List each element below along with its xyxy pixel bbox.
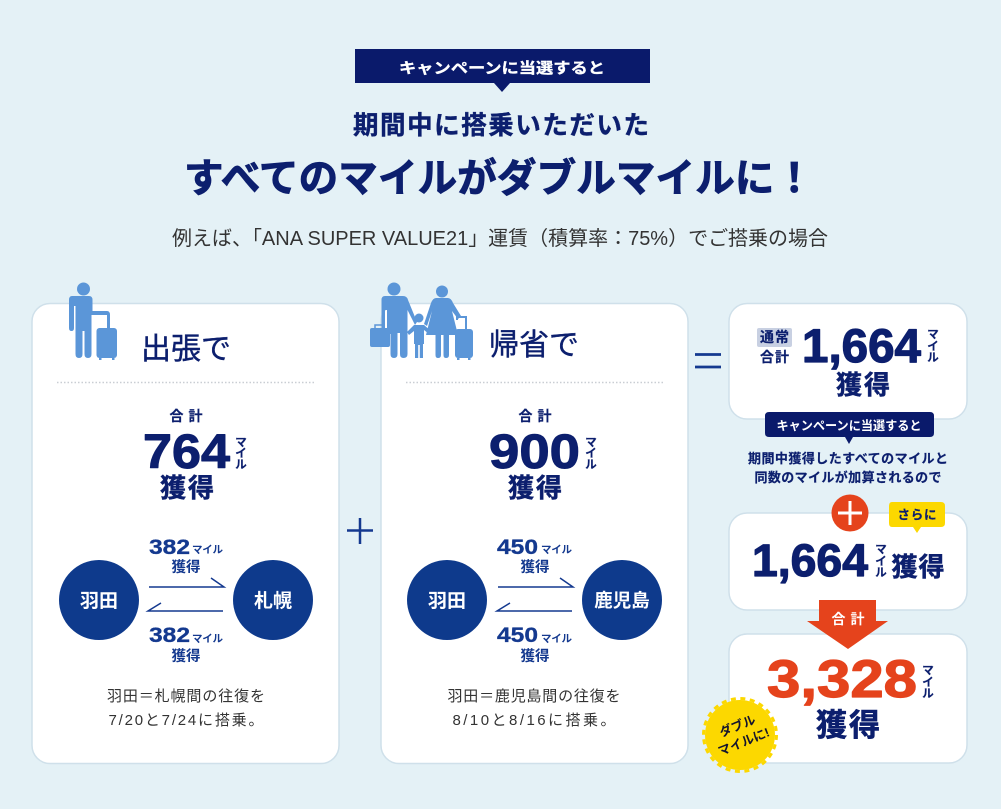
miles unit bbox=[922, 665, 934, 700]
miles unit: イ bbox=[235, 447, 247, 460]
badge: double miles bbox=[704, 698, 776, 772]
miles unit: イ bbox=[927, 340, 939, 353]
earned label: 獲得 bbox=[160, 473, 214, 503]
flight note: 7/20と7/24に搭乗。 bbox=[108, 712, 264, 729]
miles unit: ル bbox=[927, 352, 939, 364]
further tag bbox=[889, 502, 945, 533]
panel: final total bbox=[729, 634, 967, 763]
campaign callout: キャンペーンに当選すると bbox=[776, 418, 922, 433]
equals sign bbox=[695, 354, 721, 367]
heading line 1: 期間中に搭乗いただいた bbox=[353, 112, 649, 140]
explanation text: 期間中獲得したすべてのマイルと bbox=[748, 451, 948, 466]
panel: normal total: 通常 bbox=[760, 329, 789, 345]
plus sign bbox=[347, 518, 373, 544]
panel: business trip bbox=[32, 282, 339, 764]
earned label: 獲得 bbox=[508, 473, 562, 503]
miles number: 3,328 bbox=[767, 650, 917, 709]
miles unit: ル bbox=[585, 459, 597, 471]
route diagram: マイル bbox=[192, 633, 224, 645]
total label: 合計 bbox=[170, 408, 202, 424]
flight note: 羽田＝札幌間の往復を bbox=[107, 688, 265, 705]
dotted divider bbox=[406, 382, 663, 384]
badge: double miles: ダブル bbox=[717, 712, 758, 740]
miles unit bbox=[585, 437, 597, 471]
miles unit: マ bbox=[927, 329, 939, 341]
panel heading: 帰省で bbox=[489, 329, 579, 362]
miles unit: ル bbox=[922, 688, 934, 700]
miles unit bbox=[875, 544, 887, 579]
miles unit bbox=[927, 329, 939, 364]
route diagram: 獲得 bbox=[172, 558, 200, 576]
main title: すべてのマイルがダブルマイルに！ bbox=[184, 157, 814, 201]
campaign banner bbox=[355, 49, 650, 92]
flight note bbox=[107, 688, 265, 729]
total miles: 764 bbox=[143, 426, 230, 479]
total label: 合計 bbox=[760, 349, 789, 365]
panel heading: 出張で bbox=[141, 333, 231, 366]
dotted divider bbox=[57, 382, 314, 384]
earned label: 獲得 bbox=[816, 708, 880, 743]
route diagram: 獲得 bbox=[520, 647, 550, 665]
arrow: total: 合計 bbox=[832, 611, 864, 627]
route diagram: 450 bbox=[497, 536, 538, 559]
miles unit: イ bbox=[875, 555, 887, 568]
explanation text: 同数のマイルが加算されるので bbox=[754, 470, 942, 485]
route diagram: 382 bbox=[149, 624, 190, 647]
route diagram: 羽田 bbox=[428, 591, 466, 612]
route diagram: マイル bbox=[541, 544, 572, 556]
miles number: 1,664 bbox=[802, 319, 921, 372]
flight note: 8/10と8/16に搭乗。 bbox=[452, 712, 616, 729]
total label: 合計 bbox=[518, 408, 552, 424]
miles unit: マ bbox=[922, 665, 934, 677]
normal tag bbox=[757, 328, 792, 347]
flight note: 羽田＝鹿児島間の往復を bbox=[448, 688, 620, 705]
route diagram: マイル bbox=[541, 633, 572, 645]
panel: normal total bbox=[729, 304, 967, 419]
arrow: total bbox=[807, 600, 888, 649]
miles unit: イ bbox=[585, 447, 597, 460]
badge: double miles: マイルに! bbox=[716, 725, 772, 759]
icon: family with luggage bbox=[370, 282, 473, 360]
route diagram bbox=[59, 536, 313, 665]
route diagram: 450 bbox=[497, 624, 538, 647]
subtitle: 例えば、「ANA SUPER VALUE21」運賃（積算率：75%）でご搭乗の場合 bbox=[172, 227, 828, 250]
earned label: 獲得 bbox=[892, 552, 944, 582]
route diagram: 獲得 bbox=[172, 647, 200, 665]
route diagram bbox=[407, 536, 662, 665]
miles unit: マ bbox=[235, 437, 247, 449]
route diagram: 札幌 bbox=[254, 590, 292, 612]
icon: traveller with suitcase bbox=[69, 282, 117, 360]
miles unit: マ bbox=[585, 437, 597, 449]
panel: homecoming bbox=[370, 282, 688, 764]
route diagram: マイル bbox=[192, 544, 224, 556]
route diagram: 羽田 bbox=[80, 591, 118, 612]
miles unit bbox=[235, 437, 247, 471]
route diagram: 382 bbox=[149, 536, 190, 559]
campaign banner: キャンペーンに当選すると bbox=[399, 59, 605, 77]
panel: bonus miles bbox=[729, 513, 967, 610]
route diagram: 獲得 bbox=[520, 558, 550, 576]
miles unit: イ bbox=[922, 676, 934, 689]
icon: red plus bbox=[832, 494, 868, 532]
miles unit: マ bbox=[875, 544, 887, 556]
further tag: さらに bbox=[898, 508, 936, 522]
miles unit: ル bbox=[875, 567, 887, 579]
explanation text bbox=[748, 451, 948, 485]
miles unit: ル bbox=[235, 459, 247, 471]
miles number: 1,664 bbox=[752, 535, 868, 586]
campaign callout bbox=[765, 412, 934, 444]
route diagram: 鹿児島 bbox=[594, 590, 650, 611]
flight note bbox=[448, 688, 620, 729]
total miles: 900 bbox=[489, 426, 580, 479]
earned label: 獲得 bbox=[836, 370, 890, 400]
